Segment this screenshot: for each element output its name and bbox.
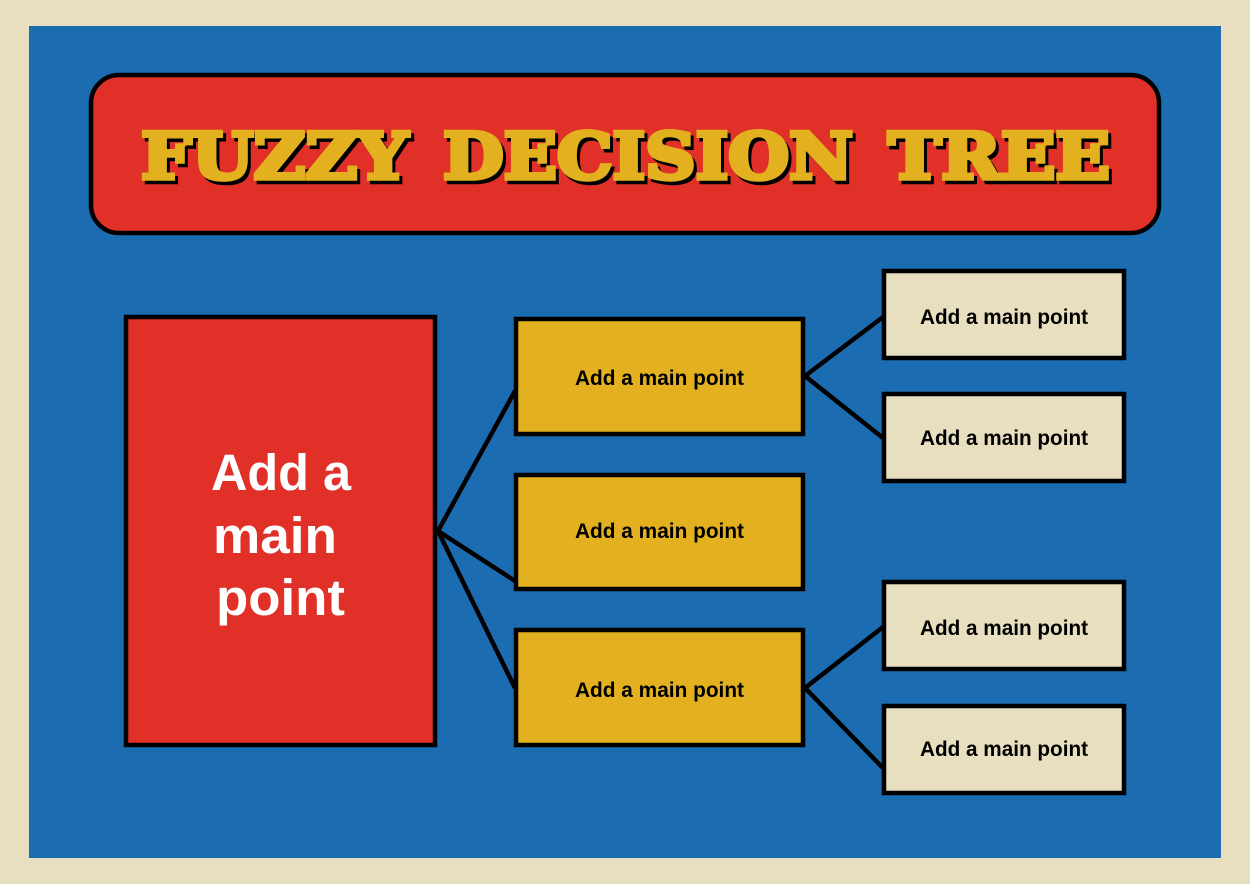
title: [141, 120, 1113, 198]
cream box 4: Add a main point: [920, 738, 1088, 761]
root text: main: [213, 507, 337, 564]
title banner: [91, 75, 1159, 233]
title: TREE: [888, 120, 1110, 194]
yellow box 1: Add a main point: [575, 367, 744, 390]
title: DECISION: [446, 123, 856, 198]
root text: Add a: [211, 444, 352, 501]
yellow box 2: [516, 475, 803, 589]
cream box 2: [884, 394, 1124, 481]
connector lines: [438, 317, 883, 768]
yellow box 1: [516, 319, 803, 434]
root text: [211, 444, 352, 626]
cream box 2: Add a main point: [920, 427, 1088, 450]
yellow box 2: Add a main point: [575, 520, 744, 543]
title: TREE: [891, 123, 1113, 198]
yellow box 3: [516, 630, 803, 745]
root box: [126, 317, 435, 745]
cream box 1: Add a main point: [920, 306, 1088, 329]
cream box 4: [884, 706, 1124, 793]
root text: point: [216, 569, 345, 626]
cream box 3: [884, 582, 1124, 669]
title: FUZZY: [141, 120, 409, 194]
yellow box 3: Add a main point: [575, 679, 744, 702]
cream box 3: Add a main point: [920, 617, 1088, 640]
title: FUZZY: [144, 123, 412, 198]
cream box 1: [884, 271, 1124, 358]
title: DECISION: [443, 120, 853, 194]
